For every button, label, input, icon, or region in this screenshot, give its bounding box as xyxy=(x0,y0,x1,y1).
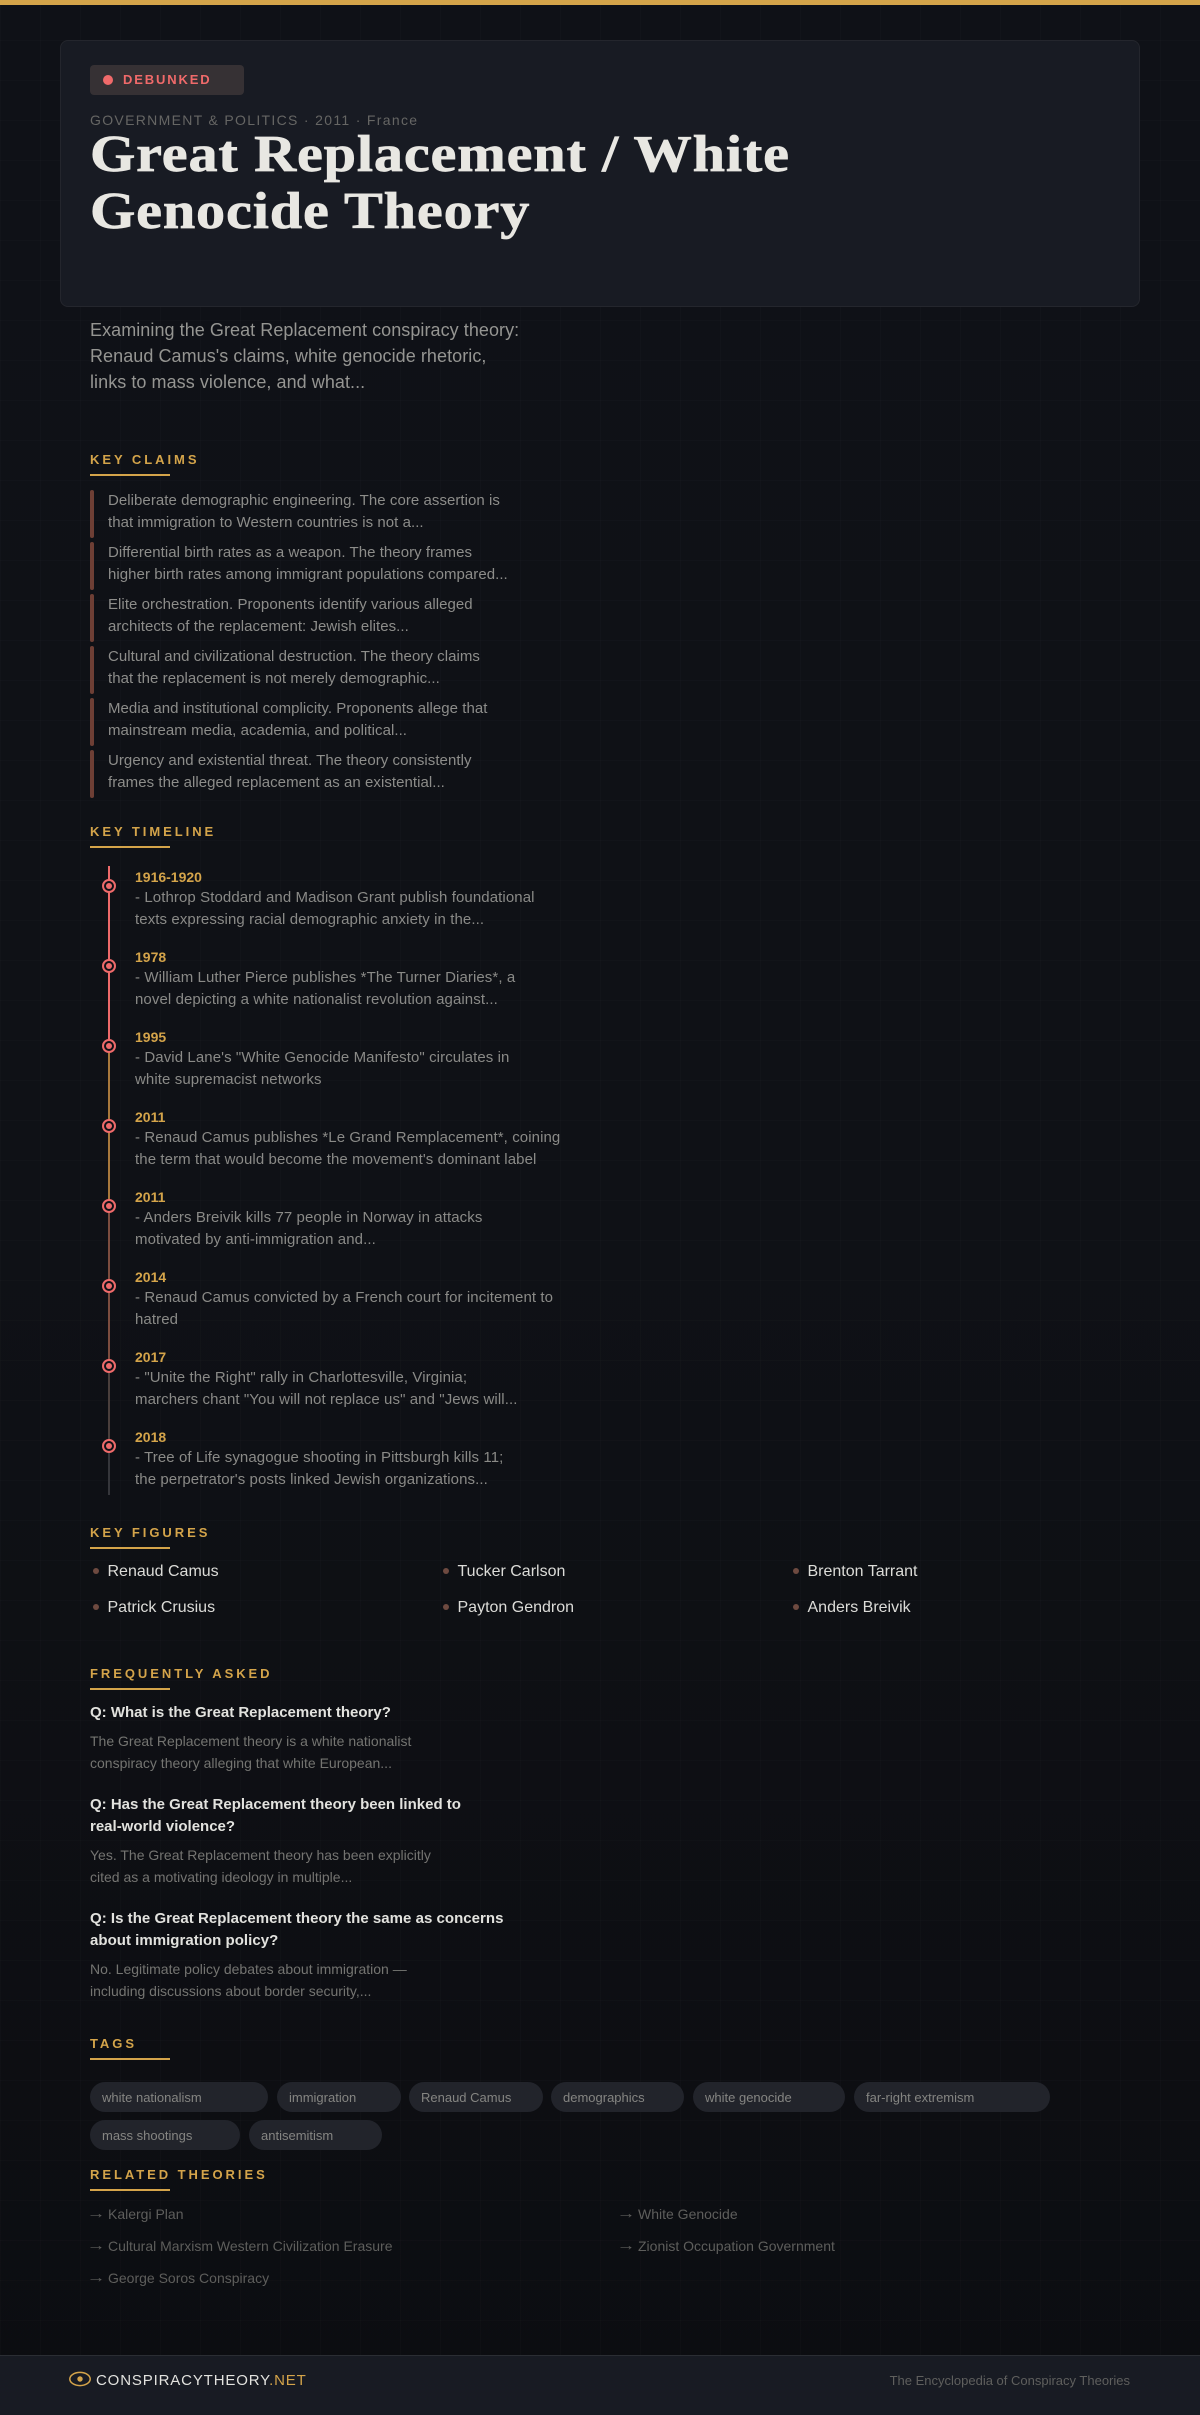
claim 4: Cultural and civilizational destruction. The theory claims xyxy=(108,648,480,665)
claim 1 xyxy=(90,490,500,538)
related link xyxy=(620,2204,738,2224)
tag: far-right extremism xyxy=(866,2090,974,2105)
panel: key claims xyxy=(90,490,508,798)
question 3 xyxy=(90,1910,503,1949)
event 1916-1920: - Lothrop Stoddard and Madison Grant publish foundational xyxy=(135,888,535,906)
question 3: about immigration policy? xyxy=(90,1932,278,1949)
related link: → xyxy=(616,2237,635,2253)
event 1978: - William Luther Pierce publishes *The Turner Diaries*, a xyxy=(135,968,515,986)
event 1916-1920 xyxy=(135,869,535,928)
question 3: Q: Is the Great Replacement theory the same as concerns xyxy=(90,1910,503,1927)
event 2018: - Tree of Life synagogue shooting in Pittsburgh kills 11; xyxy=(135,1448,503,1466)
event 1978: 1978 xyxy=(135,949,166,965)
question 1: Q: What is the Great Replacement theory? xyxy=(90,1704,391,1721)
icon: status dot xyxy=(103,75,113,85)
answer 3 xyxy=(90,1961,407,1999)
panel: related theories xyxy=(86,2205,835,2286)
category line: GOVERNMENT & POLITICS · 2011 · France xyxy=(90,112,418,128)
badge label: DEBUNKED xyxy=(123,72,211,87)
figure: Patrick Crusius: Patrick Crusius xyxy=(108,1599,215,1616)
tag: mass shootings xyxy=(102,2128,192,2143)
event 1995 xyxy=(135,1029,509,1088)
question 2: Q: Has the Great Replacement theory been linked to xyxy=(90,1796,461,1813)
event 2017: 2017 xyxy=(135,1349,166,1365)
panel: key figures xyxy=(93,1563,918,1616)
footer tagline: The Encyclopedia of Conspiracy Theories xyxy=(890,2373,1130,2388)
figure: Renaud Camus: Renaud Camus xyxy=(108,1563,219,1580)
related link: George Soros Conspiracy xyxy=(108,2270,269,2286)
subtitle: Renaud Camus's claims, white genocide rhetoric, xyxy=(90,346,486,366)
logo wordmark: CONSPIRACYTHEORY.NET xyxy=(96,2372,307,2389)
event 2011 Camus: 2011 xyxy=(135,1109,165,1125)
event 1995: 1995 xyxy=(135,1029,166,1045)
event 1995: white supremacist networks xyxy=(135,1070,322,1088)
heading: key claims: KEY CLAIMS xyxy=(90,452,199,467)
related link: Kalergi Plan xyxy=(108,2206,184,2222)
figure: Anders Breivik: Anders Breivik xyxy=(808,1599,911,1616)
figure: Payton Gendron: Payton Gendron xyxy=(458,1599,574,1616)
event 2018: the perpetrator's posts linked Jewish organizations... xyxy=(135,1470,488,1488)
heading: key figures: KEY FIGURES xyxy=(90,1525,210,1540)
panel: tag chips xyxy=(90,2082,1050,2150)
panel: hero card xyxy=(60,40,1140,307)
tag: antisemitism xyxy=(261,2128,333,2143)
title: Genocide Theory xyxy=(90,183,530,240)
tag xyxy=(277,2082,401,2112)
answer 2: Yes. The Great Replacement theory has been explicitly xyxy=(90,1847,431,1863)
related link: → xyxy=(616,2205,635,2221)
tag xyxy=(854,2082,1050,2112)
tag: white genocide xyxy=(705,2090,792,2105)
claim 1: that immigration to Western countries is not a... xyxy=(108,514,424,531)
tag: Renaud Camus xyxy=(421,2090,511,2105)
event 1916-1920: 1916-1920 xyxy=(135,869,202,885)
claim 2: Differential birth rates as a weapon. The theory frames xyxy=(108,544,472,561)
title xyxy=(90,126,790,240)
answer 3: No. Legitimate policy debates about immigration — xyxy=(90,1961,407,1977)
claim 3: Elite orchestration. Proponents identify various alleged xyxy=(108,596,473,613)
tag xyxy=(249,2120,382,2150)
claim 2: higher birth rates among immigrant populations compared... xyxy=(108,566,508,583)
heading: related theories: RELATED THEORIES xyxy=(90,2167,268,2182)
badge: debunked xyxy=(90,65,244,95)
event 2017 xyxy=(135,1349,517,1408)
answer 1 xyxy=(90,1733,412,1771)
subtitle: Examining the Great Replacement conspiracy theory: xyxy=(90,320,519,340)
timeline spine and nodes xyxy=(102,866,116,1495)
footer xyxy=(0,2355,1200,2415)
event 2011 Camus xyxy=(135,1109,560,1168)
event 1916-1920: texts expressing racial demographic anxiety in the... xyxy=(135,910,484,928)
tag: immigration xyxy=(289,2090,356,2105)
claim 2 xyxy=(90,542,508,590)
heading: frequently asked: FREQUENTLY ASKED xyxy=(90,1666,273,1681)
heading: key timeline: KEY TIMELINE xyxy=(90,824,216,839)
heading: tags: TAGS xyxy=(90,2036,137,2051)
answer 1: The Great Replacement theory is a white nationalist xyxy=(90,1733,411,1749)
event 2014: hatred xyxy=(135,1310,178,1328)
answer 1: conspiracy theory alleging that white European... xyxy=(90,1755,392,1771)
question 2: real-world violence? xyxy=(90,1818,235,1835)
event 2017: marchers chant "You will not replace us" and "Jews will... xyxy=(135,1390,517,1408)
related link: → xyxy=(86,2205,105,2221)
claim 3 xyxy=(90,594,473,642)
top accent bar xyxy=(0,0,1200,5)
claim 3: architects of the replacement: Jewish elites... xyxy=(108,618,409,635)
related link: → xyxy=(86,2269,105,2285)
claim 6 xyxy=(90,750,472,798)
claim 4 xyxy=(90,646,480,694)
event 2011 Camus: - Renaud Camus publishes *Le Grand Remplacement*, coining xyxy=(135,1128,560,1146)
tag xyxy=(90,2082,268,2112)
event 2018 xyxy=(135,1429,503,1488)
event 1978 xyxy=(135,949,516,1008)
subtitle xyxy=(90,320,519,392)
figure: Brenton Tarrant: Brenton Tarrant xyxy=(808,1563,918,1580)
event 2011 Breivik xyxy=(135,1189,482,1248)
event 2011 Breivik: 2011 xyxy=(135,1189,165,1205)
event 2011 Breivik: motivated by anti-immigration and... xyxy=(135,1230,376,1248)
answer 2: cited as a motivating ideology in multiple... xyxy=(90,1869,352,1885)
tag xyxy=(409,2082,543,2112)
event 2011 Breivik: - Anders Breivik kills 77 people in Norway in attacks xyxy=(135,1208,482,1226)
event 2017: - "Unite the Right" rally in Charlottesville, Virginia; xyxy=(135,1368,467,1386)
figure: Tucker Carlson: Tucker Carlson xyxy=(458,1563,565,1580)
tag: white nationalism xyxy=(102,2090,202,2105)
event 2014: - Renaud Camus convicted by a French court for incitement to xyxy=(135,1288,553,1306)
panel: timeline xyxy=(102,866,560,1495)
event 2014: 2014 xyxy=(135,1269,166,1285)
claim 5: Media and institutional complicity. Proponents allege that xyxy=(108,700,488,717)
claim 1: Deliberate demographic engineering. The core assertion is xyxy=(108,492,500,509)
title: Great Replacement / White xyxy=(90,126,790,182)
event 2018: 2018 xyxy=(135,1429,166,1445)
related link: Zionist Occupation Government xyxy=(638,2238,835,2254)
answer 3: including discussions about border security,... xyxy=(90,1983,371,1999)
tag xyxy=(693,2082,845,2112)
event 2014 xyxy=(135,1269,553,1328)
tag xyxy=(90,2120,240,2150)
tag xyxy=(551,2082,684,2112)
claim 4: that the replacement is not merely demographic... xyxy=(108,670,440,687)
claim 6: Urgency and existential threat. The theory consistently xyxy=(108,752,472,769)
tag: demographics xyxy=(563,2090,645,2105)
subtitle: links to mass violence, and what... xyxy=(90,372,365,392)
related link: White Genocide xyxy=(638,2206,738,2222)
claim 5: mainstream media, academia, and political... xyxy=(108,722,407,739)
icon: eye logo xyxy=(68,2370,92,2388)
related link: Cultural Marxism Western Civilization Erasure xyxy=(108,2238,392,2254)
event 1995: - David Lane's "White Genocide Manifesto" circulates in xyxy=(135,1048,509,1066)
related link: → xyxy=(86,2237,105,2253)
claim 5 xyxy=(90,698,488,746)
answer 2 xyxy=(90,1847,431,1885)
question 2 xyxy=(90,1796,461,1835)
event 2011 Camus: the term that would become the movement's dominant label xyxy=(135,1150,536,1168)
claim 6: frames the alleged replacement as an existential... xyxy=(108,774,445,791)
event 1978: novel depicting a white nationalist revolution against... xyxy=(135,990,498,1008)
